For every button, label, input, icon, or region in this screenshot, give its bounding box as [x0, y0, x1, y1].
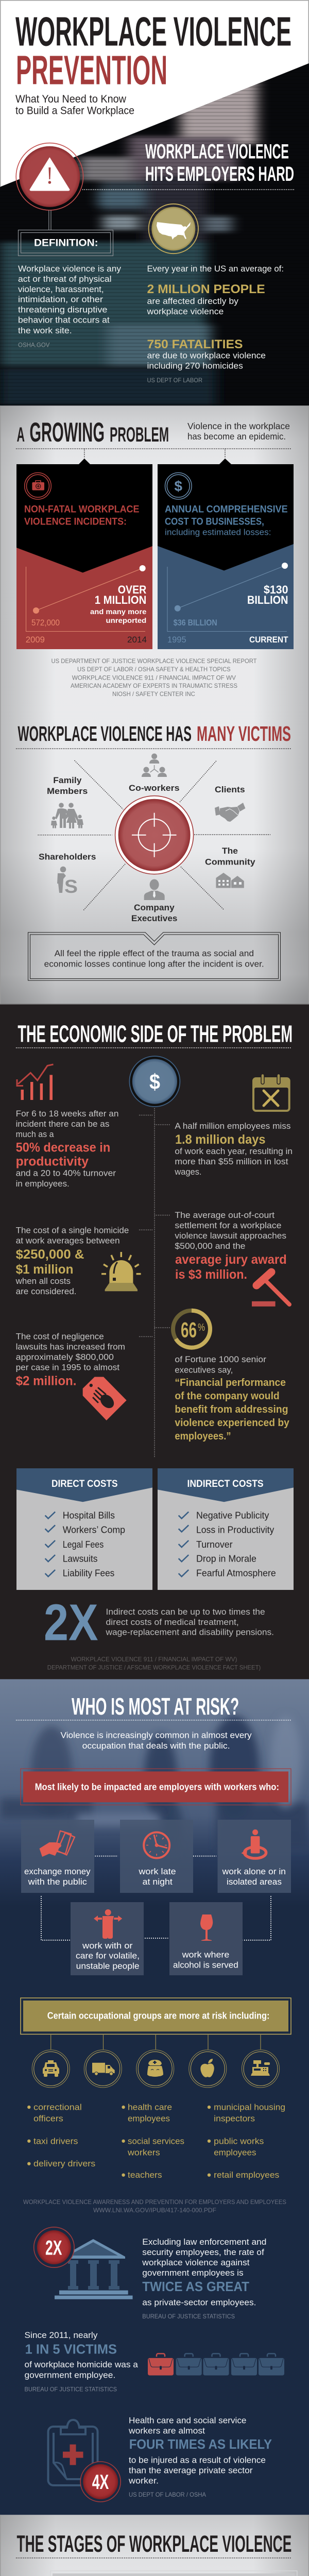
text: 1 in 5 victims: Since 2011, nearly	[25, 2330, 98, 2340]
subtitle: What You Need to Know	[15, 93, 127, 105]
icon: medical clipboard	[48, 2420, 98, 2485]
text: 1 in 5 victims: 1 IN 5 VICTIMS	[25, 2341, 117, 2357]
text: negligence lawsuits: $2 million.	[16, 1374, 77, 1388]
text: government employees: government employees is	[142, 2268, 244, 2278]
icon: government building	[55, 2239, 133, 2299]
panel: direct costs: Liability Fees	[63, 1568, 114, 1579]
statistics: affected people and fatalities: are due to workplace violence	[147, 351, 266, 361]
icon: dollar badge	[129, 1056, 180, 1107]
list: occupational groups: social services	[128, 2136, 184, 2146]
definition text: intimidation, or other	[18, 295, 103, 304]
text: productivity: and a 20 to 40% turnover	[16, 1168, 116, 1178]
list: occupational groups: workers	[127, 2147, 160, 2157]
badge: 4X: 4X	[92, 2471, 109, 2494]
line chart: incidents: 2009	[26, 635, 45, 645]
definition text: OSHA.GOV	[18, 341, 49, 348]
panel: direct costs: Lawsuits	[63, 1554, 97, 1564]
list: occupational groups: employees	[214, 2147, 256, 2157]
stat: 2X indirect costs	[44, 1594, 274, 1652]
text: productivity: 50% decrease in	[16, 1141, 110, 1155]
line chart: cost: $130	[264, 583, 288, 596]
text: government employees	[142, 2237, 266, 2320]
line chart: incidents: 1 MILLION	[95, 594, 146, 606]
icon: nurse	[136, 2050, 174, 2088]
definition text: Workplace violence is any	[18, 264, 121, 274]
title: PREVENTION	[16, 47, 167, 93]
banner: occupational groups	[21, 1998, 291, 2034]
sources: growing problem: US DEPT OF LABOR / OSHA SAFETY & HEALTH TOPICS	[77, 666, 231, 673]
icon row: five briefcases	[148, 2353, 284, 2376]
section: who is most at risk background	[0, 1679, 309, 2515]
line chart: cost	[167, 563, 288, 645]
text: negligence lawsuits: per case in 1995 to almost	[16, 1362, 119, 1372]
line chart: cost: 1995	[167, 635, 186, 645]
line chart: incidents	[26, 565, 147, 645]
panel: direct costs: Workers’ Comp	[63, 1525, 125, 1535]
section: economic side background	[0, 1004, 309, 1679]
list: occupational groups: public works	[214, 2136, 264, 2146]
panel: direct costs: Legal Fees	[63, 1539, 104, 1550]
sources: growing problem	[52, 657, 257, 698]
icon: cash register	[242, 2050, 279, 2088]
panel: indirect costs: Turnover	[196, 1539, 233, 1550]
text: 1 in 5 victims	[25, 2330, 138, 2393]
text: settlement: violence lawsuit approaches	[175, 1231, 286, 1241]
text: fortune 1000 quote: “Financial performance	[175, 1377, 286, 1388]
text: homicide cost: $250,000 &	[16, 1247, 84, 1262]
heading: hits employers hard	[145, 141, 294, 185]
text: government employees: BUREAU OF JUSTICE STATISTICS	[142, 2313, 235, 2320]
text: missed days: more than $55 million in lost	[175, 1157, 288, 1166]
section: growing problem background	[0, 405, 309, 1004]
card heading: including estimated losses:	[165, 528, 271, 537]
icon: target badge	[115, 796, 194, 874]
badge: 2X	[34, 2227, 74, 2267]
stat: 2X indirect costs: wage-replacement and disability pensions.	[105, 1628, 274, 1637]
text: settlement: settlement for a workplace	[175, 1221, 281, 1230]
icon: gavel	[252, 1272, 289, 1307]
text: missed days	[174, 1121, 293, 1177]
statistics: affected people and fatalities: workplace violence	[146, 307, 224, 316]
victim: family members	[47, 775, 88, 828]
text: fortune 1000 quote: benefit from addressing	[175, 1404, 288, 1415]
list: occupational groups: teachers	[128, 2170, 162, 2180]
text: health care workers: US DEPT OF LABOR / OSHA	[129, 2491, 206, 2498]
text: productivity: For 6 to 18 weeks after an	[16, 1109, 118, 1118]
text: fortune 1000 quote: of the company would	[175, 1391, 280, 1402]
line chart: incidents: unreported	[106, 616, 146, 624]
text: productivity: incident there can be as	[16, 1119, 109, 1129]
text: epidemic: has become an epidemic.	[187, 431, 286, 442]
panel: annual cost	[158, 459, 294, 649]
victim: shareholders	[39, 852, 96, 897]
panel: indirect costs: Loss in Productivity	[196, 1525, 274, 1535]
tile: work alone: work alone or in	[222, 1867, 286, 1876]
panel: indirect costs	[158, 1468, 294, 1590]
text: negligence lawsuits: lawsuits has increased from	[16, 1342, 125, 1352]
icon: price tag with hand	[83, 1377, 127, 1420]
panel: direct costs: Hospital Bills	[63, 1511, 115, 1521]
tile: alcohol served: alcohol is served	[173, 1960, 238, 1970]
line chart: incidents: 572,000	[31, 618, 60, 628]
card heading: VIOLENCE INCIDENTS:	[24, 517, 127, 528]
donut chart: 66 percent	[173, 1311, 210, 1348]
text: fortune 1000 quote: employees.”	[175, 1431, 231, 1442]
definition text: act or threat of physical	[18, 274, 112, 284]
tile: work late at night	[120, 1820, 193, 1893]
text: missed days: A half million employees miss	[175, 1121, 290, 1131]
victim: shareholders: Shareholders	[39, 852, 96, 861]
text: missed days: 1.8 million days	[175, 1132, 266, 1147]
line chart: cost: BILLION	[247, 594, 288, 606]
text: government employees: TWICE AS GREAT	[142, 2279, 249, 2294]
text: fortune 1000 quote: executives say,	[175, 1365, 233, 1375]
text: fortune 1000 quote: violence experienced by	[175, 1417, 290, 1429]
sources: growing problem: AMERICAN ACADEMY OF EXPERTS IN TRAUMATIC STRESS	[71, 682, 237, 689]
victim: family members: Family	[53, 775, 82, 785]
tile: alcohol served	[169, 1902, 243, 1975]
sources: economic side: DEPARTMENT OF JUSTICE / AFSCME WORKPLACE VIOLENCE FACT SHEET)	[47, 1664, 261, 1671]
tile: volatile people: unstable people	[76, 1961, 140, 1971]
icon: declining chart	[17, 1064, 54, 1100]
text: health care workers: FOUR TIMES AS LIKELY	[129, 2436, 272, 2452]
banner: occupational groups: Certain occupational groups are more at risk including:	[47, 2010, 270, 2021]
card heading	[24, 504, 139, 528]
subtitle	[15, 93, 134, 117]
list: occupational groups: employees	[128, 2113, 170, 2123]
tile: work alone: isolated areas	[227, 1877, 282, 1887]
callout: ripple effect	[28, 933, 280, 980]
section: stages background	[0, 2515, 309, 2576]
text: government employees: Excluding law enforcement and	[142, 2237, 266, 2247]
subtitle: to Build a Safer Workplace	[15, 105, 134, 117]
card heading: ANNUAL COMPREHENSIVE	[165, 504, 288, 515]
icon: dollar badge: $	[174, 478, 182, 494]
list: occupational groups	[27, 2102, 285, 2180]
list: occupational groups: correctional	[33, 2102, 82, 2112]
victim: co-workers	[129, 753, 180, 793]
tile: exchange money: with the public	[28, 1877, 87, 1887]
text: health care workers	[128, 2415, 272, 2498]
statistics: affected people and fatalities: US DEPT OF LABOR	[147, 377, 202, 384]
text: 1 in 5 victims: BUREAU OF JUSTICE STATISTICS	[25, 2386, 117, 2393]
text: health care workers: than the average private sector	[129, 2465, 253, 2475]
statistics: affected people and fatalities	[146, 264, 284, 384]
text: settlement	[175, 1210, 287, 1282]
icon: warning badge	[16, 143, 83, 210]
icon: dollar badge	[165, 473, 192, 499]
heading: a growing problem: PROBLEM	[110, 423, 169, 446]
text: government employees: as private-sector employees.	[142, 2297, 256, 2307]
tile: volatile people: care for volatile,	[76, 1951, 140, 1961]
text: intro	[61, 1730, 252, 1751]
text: homicide cost: at work averages between	[16, 1236, 120, 1246]
text: intro: Violence is increasingly common in almost every	[61, 1730, 252, 1740]
card heading: NON-FATAL WORKPLACE	[24, 504, 139, 515]
text: health care workers: Health care and social service	[129, 2415, 246, 2426]
list: occupational groups: retail employees	[214, 2170, 279, 2180]
text: productivity: much as a	[16, 1129, 54, 1139]
text: negligence lawsuits: approximately $800,000	[16, 1352, 114, 1362]
panel: indirect costs: Negative Publicity	[196, 1511, 269, 1521]
tile: exchange money: exchange money	[24, 1867, 91, 1876]
statistics: affected people and fatalities: 2 MILLION PEOPLE	[147, 282, 265, 296]
victim: shareholders: S	[64, 876, 78, 897]
heading: a growing problem: GROWING	[29, 417, 105, 448]
card heading: COST TO BUSINESSES,	[165, 517, 264, 528]
statistics: affected people and fatalities: Every year in the US an average of:	[147, 264, 284, 274]
tile: work late at night: at night	[143, 1877, 173, 1887]
donut chart: 66 percent: 66	[181, 1318, 197, 1342]
definition box	[19, 230, 113, 256]
text: fortune 1000 quote	[175, 1354, 290, 1442]
sources: occupational groups: WWW.LNI.WA.GOV/IPUB/417-140-000.PDF	[93, 2207, 216, 2214]
statistics: affected people and fatalities: including 270 homicides	[147, 361, 243, 371]
donut chart: 66 percent: %	[198, 1322, 205, 1333]
panel: indirect costs: Drop in Morale	[196, 1554, 256, 1564]
tile: volatile people	[71, 1902, 144, 1975]
sources: occupational groups	[23, 2198, 286, 2214]
tile: volatile people: work with or	[82, 1941, 133, 1951]
icon: dollar badge: $	[149, 1070, 160, 1094]
list: occupational groups: health care	[128, 2102, 172, 2112]
text: settlement: average jury award	[175, 1252, 287, 1267]
text: settlement: The average out-of-court	[175, 1210, 274, 1220]
line chart: cost: $36 BILLION	[174, 618, 217, 628]
panel: non-fatal incidents	[16, 459, 152, 649]
victim: company executives	[131, 879, 177, 923]
card heading	[165, 504, 288, 537]
text: intro: occupation that deals with the public.	[82, 1741, 230, 1751]
victim: company executives: Executives	[131, 913, 177, 923]
badge: 2X: 2X	[45, 2237, 62, 2260]
heading: a growing problem: A	[16, 423, 25, 446]
definition text: violence, harassment,	[18, 284, 104, 294]
sources: growing problem: WORKPLACE VIOLENCE 911 / FINANCIAL IMPACT OF WV	[72, 674, 236, 681]
victim: clients	[215, 785, 245, 822]
victim: company executives: Company	[134, 903, 175, 912]
text: epidemic: Violence in the workplace	[187, 421, 290, 431]
text: missed days: of work each year, resulting in	[175, 1146, 293, 1156]
victim: the community: Community	[205, 857, 255, 867]
title	[15, 8, 291, 93]
text: homicide cost: $1 million	[16, 1262, 73, 1277]
text: fortune 1000 quote: of Fortune 1000 senior	[175, 1354, 266, 1364]
definition text: the work site.	[18, 326, 72, 335]
text: homicide cost: The cost of a single homicide	[16, 1225, 129, 1235]
text: productivity: productivity	[16, 1155, 89, 1169]
victim: the community	[205, 846, 255, 888]
text: health care workers: to be injured as a result of violence	[129, 2455, 266, 2465]
sources: economic side: WORKPLACE VIOLENCE 911 / FINANCIAL IMPACT OF WV)	[71, 1655, 237, 1663]
victim: family members: Members	[47, 786, 88, 796]
list: occupational groups: municipal housing	[214, 2102, 285, 2112]
sources: economic side	[47, 1655, 261, 1671]
text: health care workers: worker.	[128, 2476, 159, 2485]
list: occupational groups: delivery drivers	[33, 2159, 95, 2168]
line chart: incidents: 2014	[127, 635, 147, 645]
text: 1 in 5 victims: government employee.	[25, 2370, 115, 2380]
banner: most likely impacted: Most likely to be impacted are employers with workers who:	[35, 1782, 279, 1792]
text: missed days: wages.	[174, 1167, 202, 1177]
stat: 2X indirect costs: Indirect costs can be up to two times the	[106, 1607, 265, 1617]
list: occupational groups: inspectors	[214, 2113, 255, 2123]
tile: exchange money	[21, 1820, 94, 1893]
list: occupational groups: taxi drivers	[33, 2136, 78, 2146]
definition text: threatening disruptive	[18, 305, 107, 315]
text: government employees: workplace violence against	[142, 2258, 250, 2267]
badge: 4X	[80, 2462, 121, 2502]
icon: US map badge	[149, 204, 198, 253]
line chart: incidents: OVER	[118, 583, 146, 596]
panel: indirect costs: INDIRECT COSTS	[187, 1479, 264, 1489]
text: homicide cost: when all costs	[15, 1276, 71, 1286]
callout: ripple effect: economic losses continue long after the incident is over.	[44, 959, 264, 969]
tile: work alone	[217, 1820, 291, 1893]
icon: delivery truck	[84, 2050, 122, 2088]
panel: direct costs	[16, 1468, 152, 1590]
text: government employees: security employees, the rate of	[142, 2247, 264, 2257]
stat: 2X indirect costs: direct costs of medical treatment,	[106, 1617, 239, 1627]
icon: taxi	[32, 2050, 70, 2088]
panel: indirect costs: Fearful Atmosphere	[196, 1568, 276, 1579]
statistics: affected people and fatalities: 750 FATALITIES	[147, 337, 243, 351]
text: settlement: $500,000 and the	[175, 1241, 245, 1251]
text: homicide cost: are considered.	[16, 1286, 77, 1296]
victim: co-workers: Co-workers	[129, 783, 180, 793]
tile: alcohol served: work where	[182, 1950, 229, 1960]
victim: the community: The	[222, 846, 238, 856]
tile: work late at night: work late	[138, 1867, 176, 1876]
text: homicide cost	[15, 1225, 129, 1296]
text: productivity: in employees.	[16, 1179, 70, 1189]
stat: 2X indirect costs: 2X	[44, 1594, 98, 1652]
icon: calendar	[252, 1074, 290, 1112]
section: header photo background	[0, 52, 309, 407]
statistics: affected people and fatalities: are affected directly by	[147, 296, 239, 306]
text: epidemic	[187, 421, 290, 442]
icon: apple	[189, 2050, 227, 2088]
line chart: incidents: and many more	[90, 607, 147, 616]
callout: ripple effect: All feel the ripple effect of the trauma as social and	[55, 948, 254, 958]
victim: clients: Clients	[215, 785, 245, 794]
sources: growing problem: NIOSH / SAFETY CENTER INC	[112, 690, 195, 698]
text: settlement: is $3 million.	[175, 1267, 247, 1282]
text: productivity	[16, 1109, 118, 1189]
text: 1 in 5 victims: of workplace homicide was a	[25, 2360, 138, 2369]
definition box: DEFINITION:	[34, 238, 98, 248]
definition text	[18, 264, 121, 348]
text: negligence lawsuits	[16, 1332, 125, 1388]
icon: siren	[101, 1252, 141, 1291]
banner: most likely impacted	[21, 1769, 291, 1805]
panel: direct costs: DIRECT COSTS	[52, 1479, 117, 1489]
definition text: behavior that occurs at	[18, 315, 110, 325]
sources: occupational groups: WORKPLACE VIOLENCE AWARENESS AND PREVENTION FOR EMPLOYERS AND EMPLOYEES	[23, 2198, 286, 2206]
connector: badge to definition	[49, 210, 51, 230]
sources: growing problem: US DEPARTMENT OF JUSTICE WORKPLACE VIOLENCE SPECIAL REPORT	[52, 657, 257, 665]
text: negligence lawsuits: The cost of negligence	[16, 1332, 104, 1342]
text: health care workers: workers are almost	[128, 2426, 205, 2436]
list: occupational groups: officers	[33, 2113, 63, 2123]
panel: level one	[0, 2571, 297, 2576]
icon: medical case	[25, 473, 51, 499]
line chart: cost: CURRENT	[249, 635, 288, 645]
